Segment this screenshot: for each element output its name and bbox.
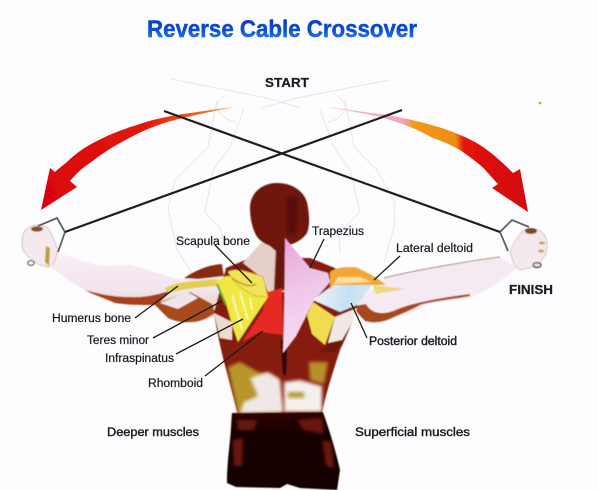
label: Superficial muscles: Superficial muscles [355,427,470,439]
label: Deeper muscles: Deeper muscles [107,427,199,439]
torso [214,258,357,415]
neck and upper back [243,236,285,292]
hair shading [286,196,298,236]
label: Scapula bone: Scapula bone [176,236,250,248]
label: FINISH: FINISH [509,283,553,297]
cables [65,110,500,232]
lat highlight right [328,308,357,343]
label: Teres minor: Teres minor [87,335,149,347]
label: Trapezius: Trapezius [312,226,364,238]
left handle [38,218,65,252]
cable from top right to left handle [65,110,402,232]
left arm [52,252,236,322]
superficial yellow muscle [307,302,335,345]
handles [38,218,529,252]
label: Rhomboid: Rhomboid [148,378,203,390]
right handle [500,220,529,251]
label: Infraspinatus: Infraspinatus [105,353,174,365]
infraspinatus and scapula [214,270,268,342]
left hand [22,225,58,267]
lat shadow right [320,340,342,352]
leader lines [135,239,400,376]
right hand [510,229,547,270]
spine shadow [274,250,285,292]
right arm [352,257,517,323]
title: Reverse Cable Crossover [147,16,417,43]
speck [539,102,541,104]
teres minor [217,284,226,305]
motion arrow: left [41,107,235,210]
label: Lateral deltoid: Lateral deltoid [396,243,473,255]
cable from top left to right handle [164,111,500,232]
lower back highlights [228,340,328,414]
start position ghost outline [168,79,395,273]
label: START: START [265,76,309,90]
trapezius [283,238,330,353]
label: Humerus bone: Humerus bone [52,313,131,325]
hand shading and grip [28,226,545,267]
label: Posterior deltoid: Posterior deltoid [369,336,457,348]
shorts highlights [233,418,334,468]
posterior deltoid [313,285,373,312]
rhomboid muscle [242,288,283,342]
body figure [22,183,547,490]
lateral deltoid pale stripe [334,277,372,284]
lateral deltoid [330,267,386,290]
motion arrow: right [327,107,528,212]
head [250,183,309,252]
shorts [227,412,340,490]
